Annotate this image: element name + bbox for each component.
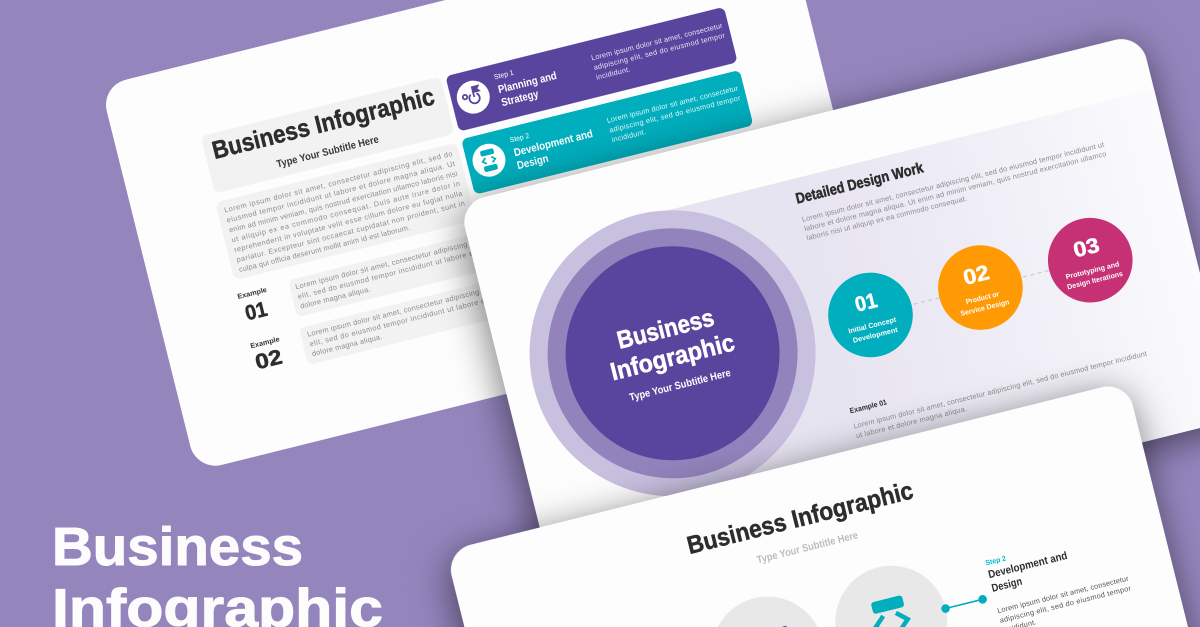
text block: introduction: ut aliquip ex ea commodo consequat. Duis aute irure dolor in: [231, 179, 461, 244]
example 01 text panel: dolore magna aliqua.: [299, 284, 371, 311]
icon: planning and strategy: [461, 86, 482, 106]
step circle 02: Product or: [965, 289, 1000, 306]
text block: step 2 description: Design: [990, 576, 1024, 595]
step 1 card: adipiscing elit, sed do eiusmod tempor: [593, 30, 726, 72]
text block: introduction: Lorem ipsum dolor sit amet, consectetur adipiscing elit, sed do: [223, 149, 453, 215]
step 1 card: incididunt.: [595, 65, 631, 82]
text block: example 01: ut labore et dolore magna aliqua.: [855, 404, 968, 440]
slide one background: [100, 0, 881, 471]
panel: title block: Business Infographic: [209, 83, 437, 165]
text block: step 2 description: Lorem ipsum dolor sit amet, consectetur: [996, 574, 1130, 615]
text block: step 2 description: adipiscing elit, sed do eiusmod tempor: [999, 583, 1132, 625]
main title: [52, 517, 383, 627]
step circle 03: Design Iterations: [1066, 269, 1124, 291]
step 2 card: [461, 70, 753, 195]
text block: introduction: [215, 142, 476, 280]
connector with end dots: [940, 594, 988, 614]
text block: introduction: eiusmod tempor incididunt ut labore et dolore magna aliqua. Ut: [226, 159, 456, 225]
step 1 card: Lorem ipsum dolor sit amet, consectetur: [590, 21, 724, 62]
example 02 text panel: Lorem ipsum dolor sit amet, consectetur adipiscing: [306, 287, 480, 339]
step 2 card: Development and: [513, 128, 594, 159]
slide two background: [459, 34, 1200, 589]
concentric circle badge: [499, 180, 846, 527]
step 2 circle with code icon: [823, 554, 959, 627]
example 02 label: Example: [249, 334, 281, 350]
example 02 text panel: elit, sed do eiusmod tempor incididunt ut labore et: [309, 295, 488, 348]
step 1 circle with icon: [700, 585, 836, 627]
text block: design description: laboris nisi ut aliquip ex ea commodo consequat.: [806, 194, 968, 242]
step circle 03: 03: [1071, 234, 1102, 262]
text block: introduction: pariatur. Excepteur sint occaecat cupidatat non proident, sunt in: [235, 199, 466, 264]
concentric circle badge: Type Your Subtitle Here: [628, 367, 732, 404]
text block: introduction: reprehenderit in voluptate velit esse cillum dolore eu fugiat nulla: [233, 188, 464, 254]
step 2 card: Lorem ipsum dolor sit amet, consectetur: [606, 83, 740, 125]
text block: example 01: Lorem ipsum dolor sit amet, consectetur adipiscing elit, sed do eiusmod tempor incididunt: [852, 349, 1148, 431]
step circle 02: 02: [961, 261, 992, 290]
example 01 text panel: Lorem ipsum dolor sit amet, consectetur adipiscing: [294, 240, 468, 291]
icon: development and design: [480, 149, 498, 171]
text block: design description: Lorem ipsum dolor sit amet, consectetur adipiscing elit, sed do eiusmod tempor incididunt ut: [801, 140, 1105, 224]
panel: slide one, text and steps: [100, 0, 881, 471]
example 02 text panel: dolore magna aliqua.: [311, 332, 383, 358]
step circle 01: 01: [853, 289, 880, 317]
example 02 label: 02: [253, 346, 285, 374]
step 2 card: incididunt.: [611, 127, 647, 144]
example 01 label: Example: [236, 285, 268, 301]
text block: step 2 description: Step 2: [984, 553, 1007, 567]
step circle 03: [1039, 209, 1142, 311]
concentric circle badge: Business: [614, 304, 717, 355]
step circle 01: [819, 264, 922, 366]
panel: slide three, step diagram: [446, 381, 1200, 627]
text block: example 01: Example 01: [849, 397, 888, 415]
text block: introduction: enim ad minim veniam, quis nostrud exercitation ullamco laboris nisi: [228, 169, 459, 234]
heading: business infographic: Business Infographic: [684, 477, 916, 560]
text block: step 2 description: Development and: [987, 550, 1069, 581]
step circle 02: Service Design: [959, 297, 1010, 318]
example 01 text panel: [288, 230, 501, 317]
panel: title block: Type Your Subtitle Here: [275, 133, 380, 171]
example 02 text panel: [299, 277, 513, 365]
panel: slide two, detailed design work: [459, 34, 1200, 589]
text block: design description: labore et dolore magna aliqua. Ut enim ad minim veniam, quis nostrud exercitation ullamco: [803, 149, 1107, 233]
text block: step 2 description: [984, 526, 1135, 627]
step circle 01: Initial Concept: [847, 315, 898, 335]
step circle 01: Development: [852, 325, 899, 345]
example 01 label: 01: [243, 298, 270, 325]
slide three background: [446, 381, 1200, 627]
text block: introduction: culpa qui officia deserunt mollit anim id est laborum.: [238, 223, 411, 274]
main title: Business: [52, 517, 303, 577]
step 1 card: Planning and: [497, 70, 558, 96]
heading: detailed design work: Detailed Design Work: [794, 159, 926, 208]
step circle 02: [929, 236, 1032, 339]
step 2 card: Design: [516, 153, 550, 172]
step 1 card: Step 1: [493, 68, 515, 81]
example 02 label: [249, 334, 287, 375]
subtitle: Type Your Subtitle Here: [756, 529, 860, 566]
dashed connector: [870, 260, 1090, 315]
step 1 card: Strategy: [500, 88, 541, 109]
step 2 card: Step 2: [509, 131, 530, 144]
example 01 label: [236, 285, 274, 326]
concentric circle badge: Infographic: [608, 328, 738, 386]
step circle 03: Prototyping and: [1065, 259, 1120, 281]
step 1 card: [445, 7, 738, 132]
example 01 text panel: elit, sed do eiusmod tempor incididunt ut labore et: [297, 248, 476, 301]
step 2 card: adipiscing elit, sed do eiusmod tempor: [608, 93, 742, 135]
lavender content panel: [639, 89, 1200, 547]
